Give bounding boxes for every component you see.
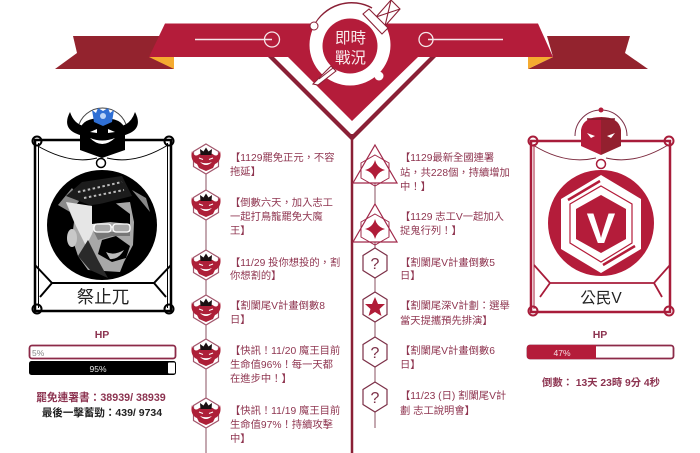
event 1: 【1129最新全國連署 [400, 151, 494, 164]
badge title: 戰況 [335, 49, 366, 67]
centre badge [310, 0, 400, 86]
event 4 [363, 292, 510, 327]
panel: left character card [32, 108, 174, 313]
event 6 [191, 398, 340, 445]
event 6: 【11/23 (日) 割闌尾V計 [400, 389, 506, 402]
icon: sword [313, 0, 400, 85]
event 1: 站，共228個，持續增加 [400, 166, 510, 179]
card frame [528, 136, 674, 316]
event 2: 【倒數六天，加入志工 [230, 196, 333, 209]
event 5: 【快訊！11/20 魔王目前 [230, 344, 340, 357]
event 5: 【割闌尾V計畫倒數6 [400, 344, 495, 357]
event 3: 日】 [400, 270, 421, 282]
right ribbon tail [528, 36, 648, 69]
event 3: 你想割的】 [230, 269, 281, 282]
shield bar [29, 361, 176, 375]
right timeline [353, 145, 510, 428]
event 6: 【快訊！11/19 魔王目前 [230, 404, 340, 417]
icon: blue crown [92, 108, 114, 126]
event 6: ? [371, 390, 380, 407]
shield bar: 95% [89, 364, 107, 374]
event 5: 日】 [400, 359, 421, 371]
HP bar outline: 5% [32, 348, 45, 358]
name label: 公民V [580, 289, 622, 307]
left banner slider [195, 32, 280, 47]
header banner [55, 24, 648, 141]
card frame [32, 136, 174, 314]
badge title [335, 29, 366, 67]
event 1 [191, 144, 335, 178]
event 4: 日】 [230, 314, 251, 326]
event 2: 一起打鳥籠罷免大魔 [230, 210, 323, 223]
event 5 [191, 339, 340, 385]
badge title: 即時 [335, 29, 366, 47]
event 6: 生命值97%！持續攻擊 [230, 418, 333, 431]
event 1 [353, 145, 510, 193]
masked head [575, 108, 627, 155]
right banner slider [419, 32, 503, 46]
pendant [96, 158, 106, 168]
HP heading: HP [593, 329, 607, 341]
name label: 祭止兀 [77, 287, 129, 307]
event 1: 拖延】 [230, 165, 261, 178]
countdown: 倒數： 13天 23時 9分 4秒 [542, 376, 660, 389]
centre divider [351, 134, 353, 453]
event 3 [363, 248, 495, 282]
left ribbon tail [55, 36, 174, 69]
signature count: 罷免連署書：38939/ 38939 [36, 391, 166, 404]
event 2 [353, 204, 504, 245]
event 6 [363, 382, 506, 417]
event 6: 劃 志工說明會】 [400, 404, 475, 417]
event 1: 【1129罷免正元，不容 [230, 151, 335, 164]
HP bar [527, 345, 674, 359]
event 3 [191, 250, 340, 282]
event 3: 【11/29 投你想投的，割 [230, 256, 340, 269]
centre chevron [268, 57, 436, 141]
left timeline [191, 144, 340, 453]
demon head [67, 108, 138, 158]
event 3: ? [371, 256, 380, 273]
event 1: 中！】 [400, 180, 431, 193]
emblem V [548, 170, 654, 276]
panel: right character card [528, 108, 674, 316]
event 6: 中】 [230, 432, 251, 445]
left ribbon fold [149, 57, 174, 69]
pendant [596, 160, 606, 168]
event 2: 【1129 志工V一起加入 [400, 210, 504, 223]
event 4: 【割闌尾深V計劃：選舉 [400, 299, 510, 312]
emblem V: V [587, 205, 616, 253]
HP heading: HP [95, 329, 109, 341]
HP bar: 47% [553, 348, 571, 358]
event 4 [191, 295, 325, 326]
event 2: 捉鬼行列！】 [400, 224, 462, 237]
event 5: 生命值96%！每一天都 [230, 358, 333, 371]
event 5 [363, 337, 495, 371]
HP bar outline [30, 346, 176, 358]
panel: right stats [527, 329, 674, 389]
main red band [149, 24, 553, 57]
event 5: 在進步中！】 [230, 372, 292, 385]
panel: left stats [29, 329, 176, 419]
event 3: 【割闌尾V計畫倒數5 [400, 256, 495, 269]
charge count: 最後一擊蓄勁：439/ 9734 [42, 406, 162, 419]
portrait [47, 170, 157, 280]
event 4: 【割闌尾V計畫倒數8 [230, 299, 325, 312]
event 2 [191, 190, 333, 237]
event 5: ? [371, 345, 380, 362]
event 2: 王】 [230, 225, 251, 237]
event 4: 當天提攜預先排演】 [400, 314, 493, 327]
right ribbon fold [528, 57, 553, 69]
